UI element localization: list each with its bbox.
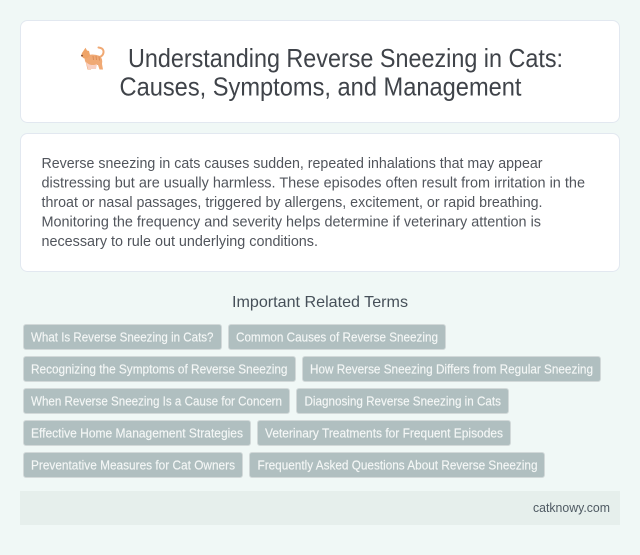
description text: necessary to rule out underlying conditions. <box>42 233 318 250</box>
footer source text: catknowy.com <box>533 500 610 515</box>
footer <box>20 491 620 525</box>
tag <box>24 388 290 414</box>
tag: Veterinary Treatments for Frequent Episodes <box>265 426 503 440</box>
tag <box>24 356 296 382</box>
description text <box>42 155 585 250</box>
tag <box>250 452 544 478</box>
tag <box>302 356 600 382</box>
tag <box>228 324 446 350</box>
tag: Frequently Asked Questions About Reverse Sneezing <box>258 458 538 472</box>
description text: throat or nasal passages, triggered by allergens, excitement, or rapid breathing. <box>42 194 542 211</box>
title text: Understanding Reverse Sneezing in Cats: <box>128 45 563 73</box>
tag <box>296 388 508 414</box>
tag: How Reverse Sneezing Differs from Regular Sneezing <box>310 362 593 376</box>
tag: Diagnosing Reverse Sneezing in Cats <box>304 394 501 408</box>
panel: title <box>20 20 620 122</box>
description text: distressing but are usually harmless. These episodes often result from irritation in the <box>42 174 585 192</box>
tag <box>24 324 222 350</box>
tag: What Is Reverse Sneezing in Cats? <box>31 330 214 344</box>
tag: Recognizing the Symptoms of Reverse Sneezing <box>31 362 288 376</box>
tag <box>24 420 250 446</box>
tag <box>24 452 242 478</box>
icon: cat <box>81 48 104 70</box>
tag: Effective Home Management Strategies <box>31 426 243 440</box>
description text: Monitoring the frequency and severity helps determine if veterinary attention is <box>42 214 541 230</box>
tag <box>258 420 510 446</box>
tag: When Reverse Sneezing Is a Cause for Concern <box>31 394 282 408</box>
tag: Common Causes of Reverse Sneezing <box>236 330 438 344</box>
title text: Causes, Symptoms, and Management <box>120 74 522 102</box>
tag: Preventative Measures for Cat Owners <box>31 458 235 472</box>
title text <box>120 45 563 102</box>
description text: Reverse sneezing in cats causes sudden, repeated inhalations that may appear <box>42 155 542 172</box>
heading: important related terms: Important Related Terms <box>232 294 408 311</box>
panel: related term tags <box>24 324 600 478</box>
panel: description <box>20 134 620 272</box>
